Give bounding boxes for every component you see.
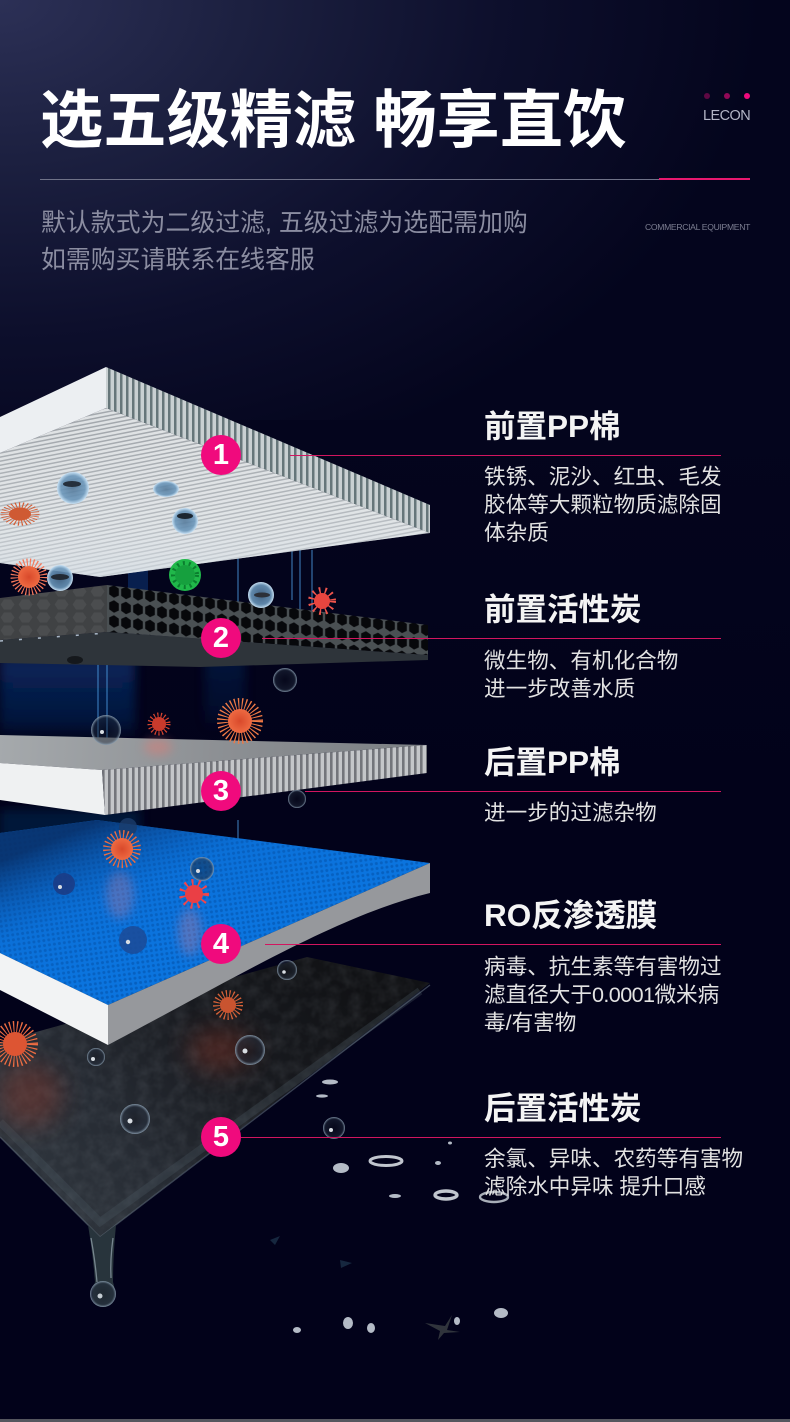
- panel: front activated carbon: [484, 591, 678, 701]
- description: [484, 1146, 743, 1199]
- layer 3: rear PP cotton: [0, 735, 427, 815]
- layer 4: RO membrane: [0, 820, 430, 1045]
- drip from layer corner: [88, 1225, 116, 1307]
- description: 余氯、异味、农药等有害物: [484, 1146, 743, 1171]
- bubbles: [47, 472, 345, 1139]
- header divider: [40, 178, 750, 180]
- description: 进一步的过滤杂物: [484, 800, 657, 825]
- connector line 2: [262, 638, 721, 639]
- title: 选五级精滤 畅享直饮: [40, 86, 626, 156]
- badge 2: 2: [213, 622, 229, 654]
- heading: 后置PP棉: [484, 744, 621, 780]
- subtitle line 1: 默认款式为二级过滤, 五级过滤为选配需加购: [41, 209, 528, 237]
- panel: rear PP cotton: [484, 744, 657, 825]
- badge 3: 3: [213, 775, 229, 807]
- viruses: [0, 506, 332, 1059]
- heading: 前置活性炭: [484, 591, 642, 627]
- heading: 后置活性炭: [484, 1090, 642, 1126]
- panel: rear activated carbon: [484, 1090, 743, 1199]
- connector line 4: [265, 944, 721, 945]
- badge 5: 5: [213, 1121, 229, 1153]
- description: [484, 954, 722, 1035]
- description: 毒/有害物: [484, 1010, 576, 1035]
- connector line 3: [305, 791, 721, 792]
- badge 3: [201, 771, 241, 811]
- panel: front PP cotton: [484, 408, 722, 545]
- description: 胶体等大颗粒物质滤除固: [484, 492, 722, 517]
- connector line 1: [290, 455, 721, 456]
- description: 病毒、抗生素等有害物过: [484, 954, 722, 979]
- description: 体杂质: [484, 520, 549, 545]
- layer 5: rear activated carbon: [0, 957, 430, 1307]
- heading: 前置PP棉: [484, 408, 621, 444]
- layer 2: front activated carbon: [0, 585, 428, 667]
- description: 微生物、有机化合物: [484, 648, 678, 673]
- brand dots: [704, 93, 750, 99]
- badge 4: [201, 924, 241, 964]
- description: 滤除水中异味 提升口感: [484, 1174, 706, 1199]
- badge 1: [201, 435, 241, 475]
- badge 2: [201, 618, 241, 658]
- blue water beams behind the layers: [0, 540, 312, 1140]
- description: 滤直径大于0.0001微米病: [484, 982, 719, 1007]
- connector line 5: [240, 1137, 721, 1138]
- badge 5: [201, 1117, 241, 1157]
- description: 进一步改善水质: [484, 676, 635, 701]
- brand tagline: COMMERCIAL EQUIPMENT: [645, 222, 750, 232]
- subtitle line 2: 如需购买请联系在线客服: [41, 246, 315, 274]
- panel: RO membrane: [484, 897, 722, 1035]
- bottom edge strip: [0, 1419, 790, 1422]
- description: [484, 464, 722, 545]
- water ripples on the floor: [270, 1080, 508, 1340]
- brand name: LECON: [703, 108, 750, 124]
- heading: RO反渗透膜: [484, 897, 657, 933]
- description: [484, 648, 678, 701]
- description: 铁锈、泥沙、红虫、毛发: [484, 464, 722, 489]
- badge 1: 1: [213, 439, 229, 471]
- badge 4: 4: [213, 928, 229, 960]
- layer 1: front PP cotton: [0, 367, 430, 577]
